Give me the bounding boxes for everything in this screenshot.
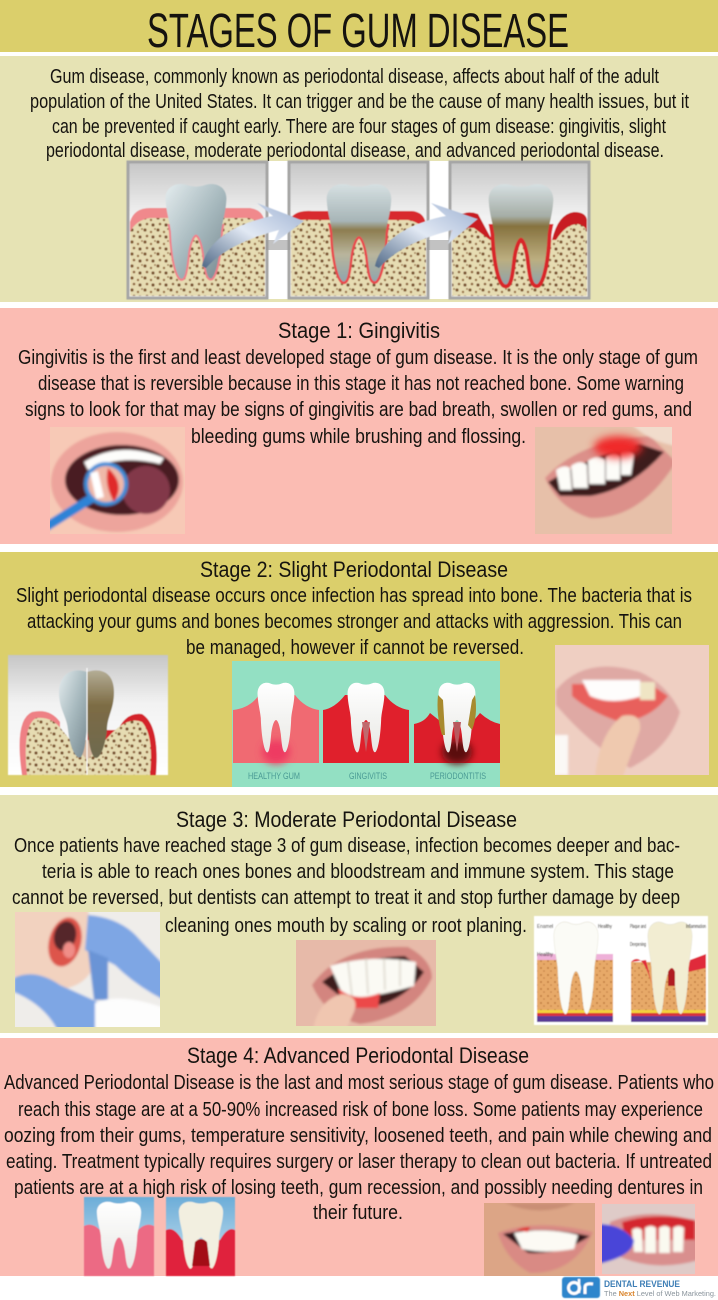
tooth stage 2: [289, 162, 428, 298]
logo wordmark: DENTAL REVENUE: [604, 1279, 680, 1290]
photo: finger pulling lip showing red gums: [296, 940, 436, 1026]
periodontitis tooth: PERIODONTITIS: [430, 771, 486, 781]
diseased side: Inflammation: [686, 924, 706, 930]
heading: stage 2: Stage 2: Slight Periodontal Disease: [200, 557, 508, 582]
healthy gum tooth: [233, 683, 319, 781]
healthy side: [537, 922, 613, 1022]
arrow shadows: [266, 240, 290, 250]
healthy side: Healthy: [537, 952, 553, 958]
panel: stage 4: [0, 1038, 718, 1280]
photo: smile with red gum: [484, 1203, 595, 1276]
diagram: healthy gum, gingivitis, periodontitis: [232, 661, 500, 787]
healthy side: Healthy: [598, 924, 612, 930]
stage 1 text: [18, 347, 698, 448]
diseased side: Plaque and: [630, 924, 646, 930]
stage 3 text: cleaning ones mouth by scaling or root planing.: [165, 915, 527, 937]
gingivitis tooth: GINGIVITIS: [349, 771, 387, 781]
arrow 2: [375, 203, 478, 268]
periodontitis tooth: [414, 683, 500, 781]
diseased side: [630, 922, 706, 1022]
logo mark: [562, 1277, 600, 1298]
panel: stage 1: [0, 308, 718, 544]
panel: introduction: [0, 56, 718, 302]
stage 4 text: [4, 1072, 714, 1224]
diseased side: Deepening: [630, 942, 646, 948]
photo: gloved hands examining patient: [15, 912, 160, 1027]
intro text: [30, 66, 689, 162]
stage 4 text: their future.: [313, 1202, 403, 1224]
stage 2 text: [16, 585, 692, 659]
logo: Dental Revenue: [562, 1277, 716, 1298]
illustration: diseased tooth: [166, 1197, 235, 1276]
photo: gloved finger lifting lip: [602, 1204, 695, 1274]
tooth stage 3: [450, 162, 589, 298]
gingivitis tooth: [323, 683, 409, 781]
stage 1 text: bleeding gums while brushing and flossing.: [191, 426, 526, 448]
diagram: split tooth healthy vs diseased: [8, 655, 168, 775]
diagram: healthy tooth vs periodontitis cross-section: [534, 916, 708, 1025]
healthy side: Enamel: [537, 924, 553, 930]
heading: stage 4: Stage 4: Advanced Periodontal Disease: [187, 1043, 529, 1068]
photo: red inflamed gums: [535, 427, 672, 534]
photo: finger lifting lip: [555, 645, 709, 775]
photo: dental mirror in mouth: [50, 427, 185, 534]
tooth stage 1: [128, 162, 267, 298]
stage 2 text: be managed, however if cannot be reversed.: [186, 637, 524, 659]
stage 3 text: [12, 835, 680, 937]
arrow 1: [202, 203, 304, 268]
panel: stage 3: [0, 795, 718, 1033]
heading: stage 3: Stage 3: Moderate Periodontal Disease: [176, 807, 517, 832]
panel: stage 2: [0, 552, 718, 787]
healthy gum tooth: HEALTHY GUM: [248, 771, 300, 781]
logo tagline: The Next Level of Web Marketing.: [604, 1289, 716, 1298]
diagram: three tooth stages with arrows: [128, 161, 589, 299]
illustration: healthy tooth: [84, 1197, 154, 1276]
heading: stage 1: Stage 1: Gingivitis: [278, 318, 440, 343]
